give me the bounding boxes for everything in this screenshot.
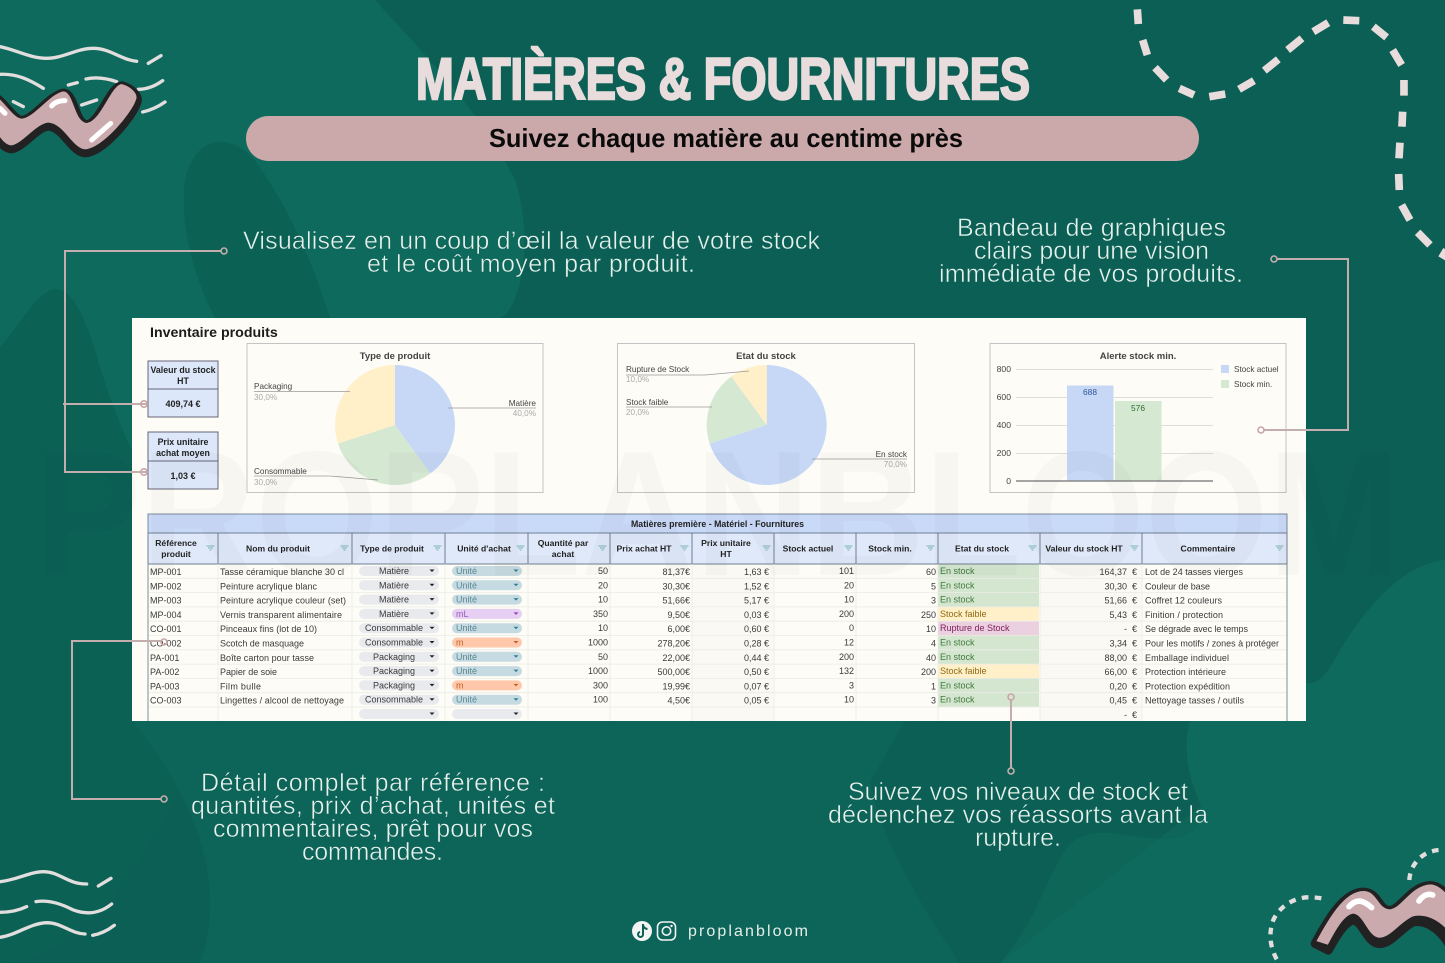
column: references: PA-002 (150, 667, 179, 677)
column: comments (1145, 567, 1279, 706)
unit dropdown pills: m (456, 680, 464, 690)
pie chart: type de produit: 40,0% (513, 409, 536, 418)
table header row: achat (552, 549, 574, 559)
column: stock value: € (1132, 653, 1137, 663)
connector: stock status (1008, 694, 1014, 774)
column: comments: Pour les motifs / zones à protéger (1145, 638, 1279, 648)
column: unit price: 0,44 € (744, 653, 769, 663)
column: references: CO-001 (150, 624, 182, 634)
KPI: average unit price (148, 432, 218, 489)
column: stock status (940, 566, 1010, 705)
column: purchase price (657, 567, 690, 706)
column: unit price: 5,17 € (744, 596, 769, 606)
column: references: MP-004 (150, 610, 182, 620)
column: product names: Papier de soie (220, 667, 277, 677)
KPI: stock value: HT (177, 376, 189, 386)
column: comments: Nettoyage tasses / outils (1145, 696, 1244, 706)
unit dropdown pills: Unité (456, 595, 477, 605)
callout text: chart band: immédiate de vos produits. (939, 260, 1243, 288)
callout text: table detail: commentaires, prêt pour vos (213, 815, 533, 843)
type dropdown pills: Packaging (373, 666, 415, 676)
bar chart: alerte stock min: 200 (997, 448, 1011, 458)
column: stock status: En stock (940, 595, 975, 605)
bar chart: alerte stock min: 800 (997, 364, 1011, 374)
column: stock status: En stock (940, 638, 975, 648)
column: purchase price: 4,50€ (667, 696, 690, 706)
column: current stock: 200 (839, 652, 854, 662)
decoration: bottom-right squiggle and dashes (1270, 850, 1445, 959)
column: stock value: € (1132, 681, 1137, 691)
KPI: average unit price: Prix unitaire (158, 437, 209, 447)
pie chart: type de produit (247, 344, 543, 492)
pie chart: etat du stock: 10,0% (626, 375, 649, 384)
decoration: bottom-left waves (0, 872, 114, 937)
column: current stock: 20 (844, 580, 854, 590)
column: unit price: 0,05 € (744, 696, 769, 706)
column: references: CO-003 (150, 696, 182, 706)
column: minimum stock: 60 (926, 567, 936, 577)
column: quantity: 50 (598, 652, 608, 662)
KPI: stock value: 409,74 € (165, 399, 201, 409)
pie chart: etat du stock: 20,0% (626, 408, 649, 417)
column: minimum stock: 250 (921, 610, 936, 620)
column: stock status: En stock (940, 566, 975, 576)
column: product names: Vernis transparent alimentaire (220, 610, 342, 620)
column: purchase price: 19,99€ (662, 681, 690, 691)
decoration: top-left waves and squiggle (0, 47, 165, 153)
table header row: Stock actuel (783, 544, 833, 554)
pie chart: etat du stock: En stock (876, 450, 908, 459)
table header row: Prix achat HT (617, 544, 672, 554)
pie chart: etat du stock: Stock faible (626, 398, 669, 407)
column: stock value: 51,66 (1104, 596, 1127, 606)
column: comments: Finition / protection (1145, 610, 1223, 620)
column: references: CO-002 (150, 638, 182, 648)
table header row: Prix unitaire (701, 538, 751, 548)
column: stock value: - (1124, 710, 1127, 720)
column: current stock: 101 (839, 566, 854, 576)
table grid (148, 564, 1287, 721)
column: quantity: 350 (593, 609, 608, 619)
callout text: restocking: rupture. (975, 824, 1061, 852)
column: minimum stock (921, 567, 936, 706)
callout text: restocking: Suivez vos niveaux de stock et (848, 778, 1188, 806)
handle text: proplanbloom (688, 923, 808, 940)
table header row: Etat du stock (955, 544, 1009, 554)
column: stock value: € (1132, 610, 1137, 620)
table header row: Unité d'achat (457, 544, 511, 554)
column: comments: Protection intérieure (1145, 667, 1226, 677)
table header row: Type de produit (360, 544, 424, 554)
column: stock value: € (1132, 596, 1137, 606)
column: stock value: € (1132, 696, 1137, 706)
unit dropdown pills: Unité (456, 652, 477, 662)
KPI: average unit price: achat moyen (156, 448, 210, 458)
column: product names: Boîte carton pour tasse (220, 653, 314, 663)
callout text: stock value: Visualisez en un coup d’œil la valeur de votre stock (243, 227, 820, 255)
bar chart: alerte stock min: 0 (1006, 476, 1011, 486)
callout text: table detail: Détail complet par référence : (201, 769, 545, 797)
column: current stock: 200 (839, 609, 854, 619)
column: minimum stock: 40 (926, 653, 936, 663)
pie chart: etat du stock: 70,0% (884, 460, 907, 469)
table header row: Stock min. (868, 544, 912, 554)
column: minimum stock: 3 (931, 596, 936, 606)
column: stock value: € (1132, 638, 1137, 648)
icon: instagram (658, 922, 676, 940)
column: unit price: 0,03 € (744, 610, 769, 620)
column: references: PA-001 (150, 653, 179, 663)
table header row: Commentaire (1181, 544, 1236, 554)
bar chart: alerte stock min: 400 (997, 420, 1011, 430)
column: stock status: En stock (940, 580, 975, 590)
column: product names: Peinture acrylique couleur (set) (220, 596, 346, 606)
type dropdown pills: Matière (379, 595, 409, 605)
column: current stock: 3 (849, 680, 854, 690)
KPI: stock value (148, 361, 218, 417)
bar chart: alerte stock min: Stock min. (1234, 380, 1272, 389)
icon: tiktok (632, 921, 652, 941)
column: stock value: 0,45 (1109, 696, 1127, 706)
column: purchase price: 500,00€ (657, 667, 690, 677)
table title band (148, 514, 1287, 533)
bar chart: alerte stock min: Alerte stock min. (1100, 351, 1176, 362)
type dropdown pills: Packaging (373, 680, 415, 690)
column: stock value: € (1132, 624, 1137, 634)
table header row: HT (720, 549, 732, 559)
bar chart: alerte stock min: 688 (1083, 387, 1097, 397)
inventory table (148, 514, 1287, 721)
column: unit price: 1,52 € (744, 581, 769, 591)
column: unit price: 1,63 € (744, 567, 769, 577)
column: unit price: 0,60 € (744, 624, 769, 634)
type dropdown pills: Packaging (373, 652, 415, 662)
connector: table detail (72, 639, 167, 802)
column: stock value: - (1124, 624, 1127, 634)
table header row (148, 533, 1287, 564)
type dropdown pills: Matière (379, 566, 409, 576)
type dropdown pills: Consommable (365, 695, 423, 705)
column: current stock: 132 (839, 666, 854, 676)
subtitle banner: Suivez chaque matière au centime près (489, 123, 963, 153)
column: stock value: 88,00 (1104, 653, 1127, 663)
type dropdown pills: Consommable (365, 638, 423, 648)
table header row: Nom du produit (246, 544, 310, 554)
unit dropdown pills: Unité (456, 666, 477, 676)
callout text: chart band: Bandeau de graphiques (957, 214, 1226, 242)
column: quantity: 50 (598, 566, 608, 576)
column: stock value: 5,43 (1109, 610, 1127, 620)
column: product names: Lingettes / alcool de nettoyage (220, 696, 344, 706)
pie chart: type de produit: Type de produit (360, 351, 431, 362)
type dropdown pills: Matière (379, 580, 409, 590)
callout text: table detail: commandes. (302, 838, 443, 866)
pie chart: type de produit: Consommable (254, 467, 307, 476)
pie chart: type de produit: Packaging (254, 382, 293, 391)
unit dropdown pills: Unité (456, 566, 477, 576)
column: stock value: 3,34 (1109, 638, 1127, 648)
column: stock status: En stock (940, 695, 975, 705)
column: current stock: 10 (844, 695, 854, 705)
column: comments: Lot de 24 tasses vierges (1145, 567, 1244, 577)
bar chart: alerte stock min (990, 344, 1286, 492)
column: stock value: 0,20 (1109, 681, 1127, 691)
unit dropdown pills: Unité (456, 695, 477, 705)
bar chart: alerte stock min: 576 (1131, 403, 1145, 413)
panel heading: Inventaire produits (150, 325, 278, 341)
column: product names: Tasse céramique blanche 30 cl (220, 567, 344, 577)
column: minimum stock: 10 (926, 624, 936, 634)
column: comments: Emballage individuel (1145, 653, 1229, 663)
column: stock value: 66,00 (1104, 667, 1127, 677)
column: unit price: 0,28 € (744, 638, 769, 648)
column: stock status: En stock (940, 680, 975, 690)
pie chart: type de produit: 30,0% (254, 393, 277, 402)
unit dropdown pills: mL (456, 609, 469, 619)
subtitle banner (246, 116, 1199, 161)
connector: chart band (1258, 256, 1348, 433)
column: comments: Couleur de base (1145, 581, 1210, 591)
column: unit price: 0,50 € (744, 667, 769, 677)
callout text: stock value: et le coût moyen par produit. (367, 250, 695, 278)
column: unit price: 0,07 € (744, 681, 769, 691)
pie chart: etat du stock (618, 344, 914, 492)
unit dropdown pills: Unité (456, 580, 477, 590)
column: minimum stock: 200 (921, 667, 936, 677)
table outer edges (148, 564, 1287, 721)
column: quantity: 100 (593, 695, 608, 705)
table title band: Matières première - Matériel - Fournitures (631, 519, 804, 529)
KPI: average unit price: 1,03 € (170, 471, 196, 481)
column: purchase price: 278,20€ (657, 638, 690, 648)
bar chart: alerte stock min: Stock actuel (1234, 365, 1279, 374)
unit dropdown pills: m (456, 638, 464, 648)
pie chart: etat du stock: Rupture de Stock (626, 365, 690, 374)
column: quantity: 10 (598, 623, 608, 633)
column: quantity: 20 (598, 580, 608, 590)
column: references: MP-002 (150, 581, 182, 591)
column: purchase price: 51,66€ (662, 596, 690, 606)
footer social handle (632, 921, 808, 941)
callout text: restocking (828, 778, 1208, 852)
title: MATIÈRES & FOURNITURES (416, 47, 1030, 112)
unit dropdown pills: Unité (456, 623, 477, 633)
column: purchase price: 6,00€ (667, 624, 690, 634)
column: minimum stock: 5 (931, 581, 936, 591)
pie chart: type de produit: 30,0% (254, 478, 277, 487)
column: current stock: 0 (849, 623, 854, 633)
table header row: Valeur du stock HT (1045, 544, 1123, 554)
column: stock value: € (1132, 710, 1137, 720)
column: product names: Scotch de masquage (220, 638, 304, 648)
column: stock status: Stock faible (940, 609, 987, 619)
column: stock value (1099, 567, 1137, 720)
decoration: top-right dashed line (1137, 9, 1445, 258)
column: quantity (588, 566, 608, 705)
column: comments: Coffret 12 couleurs (1145, 596, 1222, 606)
column: unit price (744, 567, 769, 706)
column: purchase price: 9,50€ (667, 610, 690, 620)
column: quantity: 1000 (588, 666, 608, 676)
type dropdown pills (359, 566, 439, 719)
column: comments: Se dégrade avec le temps (1145, 624, 1248, 634)
column: minimum stock: 1 (931, 681, 936, 691)
column: quantity: 1000 (588, 638, 608, 648)
column: stock value: 30,30 (1104, 581, 1127, 591)
column: stock value: € (1132, 567, 1137, 577)
column: stock status: Rupture de Stock (940, 623, 1010, 633)
column: minimum stock: 4 (931, 638, 936, 648)
pie chart: etat du stock: Etat du stock (736, 351, 797, 362)
column: stock value: € (1132, 581, 1137, 591)
callout text: chart band (939, 214, 1243, 288)
callout text: table detail (191, 769, 555, 866)
callout text: stock value (243, 227, 820, 278)
unit dropdown pills (452, 566, 522, 719)
column: product names: Pinceaux fins (lot de 10) (220, 624, 317, 634)
column: quantity: 10 (598, 595, 608, 605)
column: minimum stock: 3 (931, 696, 936, 706)
column: product names: Film bulle (220, 681, 261, 691)
bar chart: alerte stock min: 600 (997, 392, 1011, 402)
column: stock status: En stock (940, 652, 975, 662)
column: references: PA-003 (150, 681, 179, 691)
column: comments: Protection expédition (1145, 681, 1230, 691)
type dropdown pills: Matière (379, 609, 409, 619)
column: stock value: € (1132, 667, 1137, 677)
column: stock value: 164,37 (1099, 567, 1127, 577)
column: references: MP-001 (150, 567, 182, 577)
callout text: chart band: clairs pour une vision (974, 237, 1209, 265)
column: stock status: Stock faible (940, 666, 987, 676)
callout text: restocking: déclenchez vos réassorts avant la (828, 801, 1208, 829)
column: purchase price: 81,37€ (662, 567, 690, 577)
column: product names (220, 567, 346, 706)
column: current stock: 12 (844, 638, 854, 648)
column: purchase price: 30,30€ (662, 581, 690, 591)
column: quantity: 300 (593, 680, 608, 690)
type dropdown pills: Consommable (365, 623, 423, 633)
column: references: MP-003 (150, 596, 182, 606)
column: current stock: 10 (844, 595, 854, 605)
table column tints (692, 564, 1142, 721)
column: product names: Peinture acrylique blanc (220, 581, 318, 591)
table header row: Référence (155, 538, 197, 548)
pie chart: type de produit: Matière (509, 399, 536, 408)
callout text: table detail: quantités, prix d’achat, unités et (191, 792, 555, 820)
connector: stock value KPIs (63, 248, 227, 475)
table header row: produit (161, 549, 191, 559)
column: current stock (839, 566, 854, 705)
column: references (150, 567, 182, 706)
inventory panel (132, 318, 1306, 721)
column: purchase price: 22,00€ (662, 653, 690, 663)
table header row: Quantité par (538, 538, 589, 548)
KPI: stock value: Valeur du stock (150, 365, 216, 375)
